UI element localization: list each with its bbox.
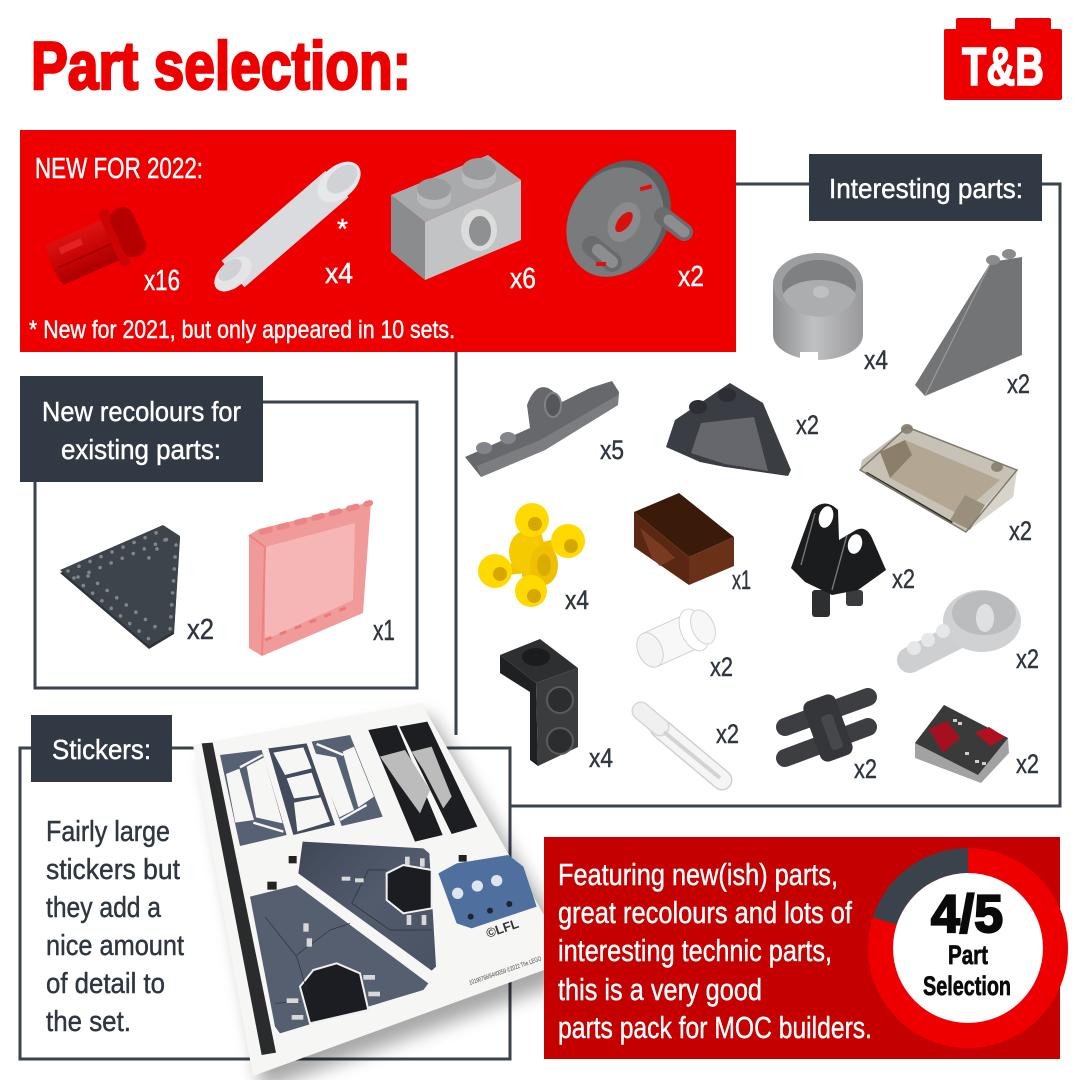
panel: new for 2022 (20, 130, 736, 352)
label: new recolours (20, 376, 263, 482)
panel: summary: Featuring new(ish) parts, (558, 857, 838, 892)
part: grey round brick (773, 253, 863, 361)
sheet: window sticker 1 (220, 750, 287, 846)
part: trans red panel (249, 502, 371, 656)
quantity: x4: x4 (589, 743, 613, 773)
quantity: x2: x2 (710, 652, 733, 682)
part: light grey gear arm (907, 590, 1021, 660)
frame: stickers box (20, 748, 510, 1059)
label: interesting parts: Interesting parts: (829, 173, 1023, 204)
logo: T&B brick (944, 18, 1062, 100)
quantity: x2: x2 (716, 719, 739, 749)
frame: new recolours box (35, 402, 417, 688)
sheet: long black strip (202, 743, 276, 1055)
panel: summary: interesting technic parts, (558, 933, 832, 968)
sheet: small print: 10190766/6440059 ©2022 The LEGO (468, 955, 543, 987)
quantity: x6: x6 (510, 263, 536, 295)
sheet: dark sticker 5 (399, 722, 477, 834)
asterisk: * (337, 213, 348, 244)
part: dark triangular plate (60, 525, 180, 649)
part: black pivot bracket (791, 504, 886, 617)
quantity: x4: x4 (864, 345, 888, 375)
rating donut: 4/5: Part (948, 940, 988, 970)
stickers description: nice amount (46, 930, 184, 962)
quantity: x1: x1 (732, 565, 751, 595)
sticker sheet photo (193, 703, 544, 1076)
part: grey technic brick (391, 155, 521, 280)
sheet: blue sticker 8 (438, 855, 537, 928)
stickers description: Fairly large (46, 816, 170, 848)
rating donut: 4/5: Selection (923, 971, 1011, 1001)
quantity: x2: x2 (892, 564, 915, 594)
logo: T&B brick: T&B (962, 37, 1044, 97)
sheet: large sticker 6 (289, 842, 436, 971)
stickers description: the set. (46, 1006, 131, 1038)
quantity: x2: x2 (187, 614, 214, 646)
part: round plate with pins (548, 142, 691, 294)
stickers description: of detail to (46, 968, 165, 1000)
sheet: LFL copyright: ©LFL (484, 916, 521, 941)
stickers description: they add a (46, 892, 162, 924)
quantity: x2: x2 (854, 754, 877, 784)
part: light grey long pin (208, 154, 368, 298)
part: black angle bracket (500, 639, 578, 766)
part: grey tall slope (915, 249, 1022, 396)
panel: summary (544, 837, 1060, 1059)
quantity: x16: x16 (144, 265, 180, 297)
quantity: x4: x4 (565, 585, 589, 615)
part: dark grey plate with hole (465, 381, 619, 477)
quantity: x2: x2 (1016, 749, 1039, 779)
part: red pin (40, 200, 151, 294)
sheet: dark sticker 4 (368, 725, 443, 842)
part: white axle pin (641, 711, 722, 780)
sticker sheet shadow (205, 715, 556, 1080)
part: dark wedge (666, 383, 791, 476)
part: white short pin (632, 605, 720, 671)
label: interesting parts (809, 154, 1042, 221)
panel: summary: parts pack for MOC builders. (558, 1010, 872, 1045)
footnote: * New for 2021, but only appeared in 10 sets. (29, 316, 455, 344)
heading: new for 2022: NEW FOR 2022: (35, 153, 203, 185)
part: trans black canopy (860, 424, 1017, 532)
panel: summary: great recolours and lots of (558, 895, 852, 930)
part: dark double pin (785, 692, 868, 764)
sheet: window sticker 3 (312, 735, 383, 826)
panel: summary: this is a very good (558, 972, 762, 1007)
rating donut: 4/5 (868, 848, 1068, 1048)
part: printed control slope (915, 705, 1009, 783)
quantity: x2: x2 (678, 261, 704, 293)
stickers description: stickers but (46, 854, 180, 886)
label: stickers (31, 715, 172, 782)
rating donut: 4/5: 4/5 (931, 885, 1003, 944)
quantity: x5: x5 (600, 435, 624, 465)
quantity: x1: x1 (373, 615, 395, 647)
part: yellow cross connector (478, 503, 585, 607)
quantity: x2: x2 (1007, 369, 1030, 399)
sheet: window sticker 2 (268, 743, 335, 835)
quantity: x2: x2 (1009, 516, 1032, 546)
stickers description (46, 816, 184, 1038)
label: stickers: Stickers: (52, 734, 151, 765)
label: new recolours: New recolours for (42, 396, 241, 427)
label: new recolours: existing parts: (61, 434, 221, 465)
part: brown suitcase (634, 493, 734, 585)
quantity: x4: x4 (325, 258, 353, 290)
quantity: x2: x2 (796, 410, 819, 440)
title: Part selection: (31, 28, 411, 104)
sheet: large sticker 7 (250, 882, 428, 1033)
quantity: x2: x2 (1016, 644, 1039, 674)
frame: interesting parts box (456, 184, 1060, 806)
